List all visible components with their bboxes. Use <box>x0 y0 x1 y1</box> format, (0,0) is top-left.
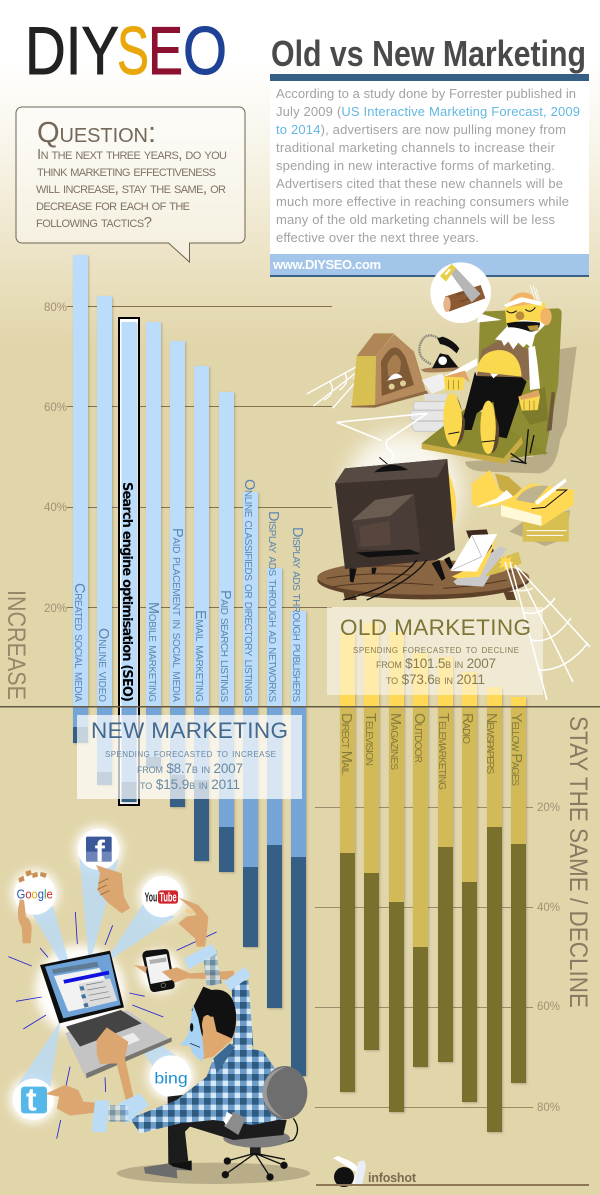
panel: intro text <box>270 74 589 277</box>
new marketing spending copy <box>105 746 276 792</box>
bar labels: old marketing: Magazines <box>387 713 403 770</box>
intro paragraph: spending in new interactive forms of marketing. <box>276 158 555 173</box>
man legs <box>144 1093 287 1178</box>
bar labels: new marketing: Paid placement in social media <box>169 528 185 702</box>
bar labels: new marketing: Search engine optimisation (SEO) <box>119 482 134 702</box>
floor shadow <box>117 1163 310 1184</box>
bar labels: new marketing: Online video <box>95 628 111 702</box>
old marketing spending copy: to $73.6b in 2011 <box>386 672 485 687</box>
grid lines and percentage labels: increase: 80% <box>44 302 67 314</box>
cobweb on radio <box>307 356 376 408</box>
infoshot wordmark: infoshot <box>368 1171 417 1185</box>
icon: Google <box>14 870 56 943</box>
glows <box>9 825 195 1123</box>
icon: Twitter: t <box>26 1082 37 1118</box>
office chair base <box>222 1118 297 1181</box>
chair shadow <box>465 347 577 473</box>
man body <box>442 338 540 454</box>
new marketing spending copy: to $15.9b in 2011 <box>140 777 240 792</box>
new marketing spending copy: from $8.7b in 2007 <box>137 761 243 776</box>
icon: Facebook: f <box>95 835 106 869</box>
bar labels: old marketing: Yellow Pages <box>508 713 524 786</box>
bar labels: new marketing <box>71 479 305 702</box>
yellow sun behind TV <box>447 468 456 535</box>
burst lines <box>8 912 217 1139</box>
infoshot logo <box>333 1156 417 1187</box>
panel: old marketing <box>327 607 543 695</box>
television <box>335 457 455 583</box>
grid lines and percentage labels: decline: 80% <box>537 1102 560 1114</box>
question text: In the next three years, do you <box>37 146 227 163</box>
shirt cuffs and raised arms <box>184 944 253 1047</box>
bar labels: old marketing: Radio <box>459 713 475 744</box>
icon: YouTube: You <box>145 891 157 905</box>
intro paragraph: much more effective in reaching consumers while <box>276 194 569 209</box>
bar labels: new marketing: Display ads through ad networks <box>265 511 281 702</box>
old marketing spending copy: from $101.5b in 2007 <box>376 656 496 671</box>
bar labels: old marketing: Newspapers <box>483 713 499 774</box>
intro paragraph: traditional marketing channels to increase their <box>276 140 556 155</box>
grid lines and percentage labels: increase: 20% <box>44 603 67 615</box>
intro paragraph: many of the old marketing channels will be less <box>276 212 556 227</box>
intro paragraph: Advertisers cited that these new channels will be <box>276 176 563 191</box>
radio <box>351 333 428 408</box>
laptop <box>40 951 172 1078</box>
old marketing spending copy: spending forecasted to decline <box>353 642 519 656</box>
round table <box>317 560 529 600</box>
intro paragraph: July 2009 (US Interactive Marketing Forecast, 2009 <box>276 104 580 119</box>
bar labels: new marketing: Mobile marketing <box>145 602 161 702</box>
logo: DIYSEO: DIY <box>25 13 119 89</box>
new marketing heading: NEW MARKETING <box>91 718 288 743</box>
TV glow <box>345 432 462 548</box>
white cable <box>337 413 427 463</box>
telephone <box>419 335 460 372</box>
question bubble <box>16 107 245 262</box>
magazines and pencil <box>501 478 574 546</box>
question text: decrease for each of the <box>36 197 190 214</box>
icon: Google: Google <box>17 888 53 902</box>
highlight box: SEO bar <box>119 318 139 805</box>
thought bubble: saw and log <box>430 262 502 323</box>
man head <box>180 987 237 1073</box>
icon: Bing: bing <box>154 1070 188 1087</box>
panel: new marketing <box>77 715 302 799</box>
armchair <box>422 308 562 464</box>
website link: www.DIYSEO.com <box>272 257 381 272</box>
icon: YouTube <box>142 876 208 947</box>
grid lines and percentage labels: increase: 60% <box>44 402 67 414</box>
intro paragraph: effective over the next three years. <box>276 230 479 245</box>
bar labels: old marketing: Direct Mail <box>338 713 354 775</box>
bar labels: old marketing: Telemarketing <box>435 713 451 790</box>
bar labels: old marketing <box>338 713 524 790</box>
icon: YouTube: Tube <box>159 891 177 905</box>
office chair back <box>262 1066 307 1119</box>
hands <box>444 371 470 391</box>
question text: following tactics? <box>36 214 152 231</box>
question text: will increase, stay the same, or <box>36 180 226 197</box>
old marketing heading: OLD MARKETING <box>340 615 531 640</box>
bar chart: new marketing <box>73 255 306 1076</box>
man head <box>495 285 552 349</box>
grid lines and percentage labels: decline: 40% <box>537 902 560 914</box>
axis label: increase: INCREASE <box>2 590 30 700</box>
axis line <box>0 706 600 708</box>
legs and shoes <box>442 393 463 447</box>
light beams <box>17 857 190 1090</box>
logo: DIYSEO: E <box>148 13 183 89</box>
icon: Bing <box>150 1055 191 1097</box>
bar labels: new marketing: Display ads through publishers <box>289 527 305 702</box>
logo: DIYSEO: O <box>183 13 227 89</box>
question text: think marketing effectiveness <box>37 163 216 180</box>
man torso <box>130 1043 285 1133</box>
new marketing spending copy: spending forecasted to increase <box>105 746 276 760</box>
footer rule <box>316 1184 589 1186</box>
bar labels: new marketing: Paid search listings <box>217 590 233 702</box>
newspapers <box>410 373 450 431</box>
icon: Facebook <box>78 829 130 913</box>
old marketing spending copy <box>353 642 519 687</box>
wallet pocket <box>224 1112 246 1135</box>
open book <box>472 470 522 507</box>
intro paragraph <box>276 86 580 245</box>
pointing hand <box>45 1085 128 1133</box>
intro paragraph: According to a study done by Forrester published in <box>276 86 576 101</box>
logo: DIYSEO <box>25 13 227 89</box>
bar labels: new marketing: Email marketing <box>192 610 208 702</box>
grid lines and percentage labels: decline: 20% <box>537 802 560 814</box>
typing hand <box>97 1027 149 1124</box>
envelopes and letters <box>450 529 522 587</box>
grid lines and percentage labels: decline <box>315 802 560 1114</box>
black power cord <box>343 560 427 600</box>
smartphone in hand <box>134 949 237 992</box>
illustration: new marketing man <box>8 825 310 1184</box>
bar labels: old marketing: Television <box>362 713 378 766</box>
bar labels: new marketing: Created social media <box>71 583 87 702</box>
cobweb: table corner <box>505 562 590 700</box>
bar labels: old marketing: Outdoor <box>411 713 427 763</box>
question text <box>36 146 227 231</box>
illustration: old marketing man <box>307 262 577 600</box>
bar chart: old marketing <box>340 623 526 1132</box>
grid lines and percentage labels: increase <box>44 302 332 615</box>
icon: Twitter <box>13 1079 54 1120</box>
intro paragraph: to 2014), advertisers are now pulling money from <box>276 122 566 137</box>
question heading: Question: <box>37 117 156 149</box>
grid lines and percentage labels: increase: 40% <box>44 502 67 514</box>
grid lines and percentage labels: decline: 60% <box>537 1001 560 1013</box>
logo: DIYSEO: S <box>117 13 149 89</box>
bar labels: new marketing: Online classifieds or directory listings <box>241 479 257 702</box>
axis label: stay the same / decline: STAY THE SAME / DECLINE <box>564 716 592 1008</box>
